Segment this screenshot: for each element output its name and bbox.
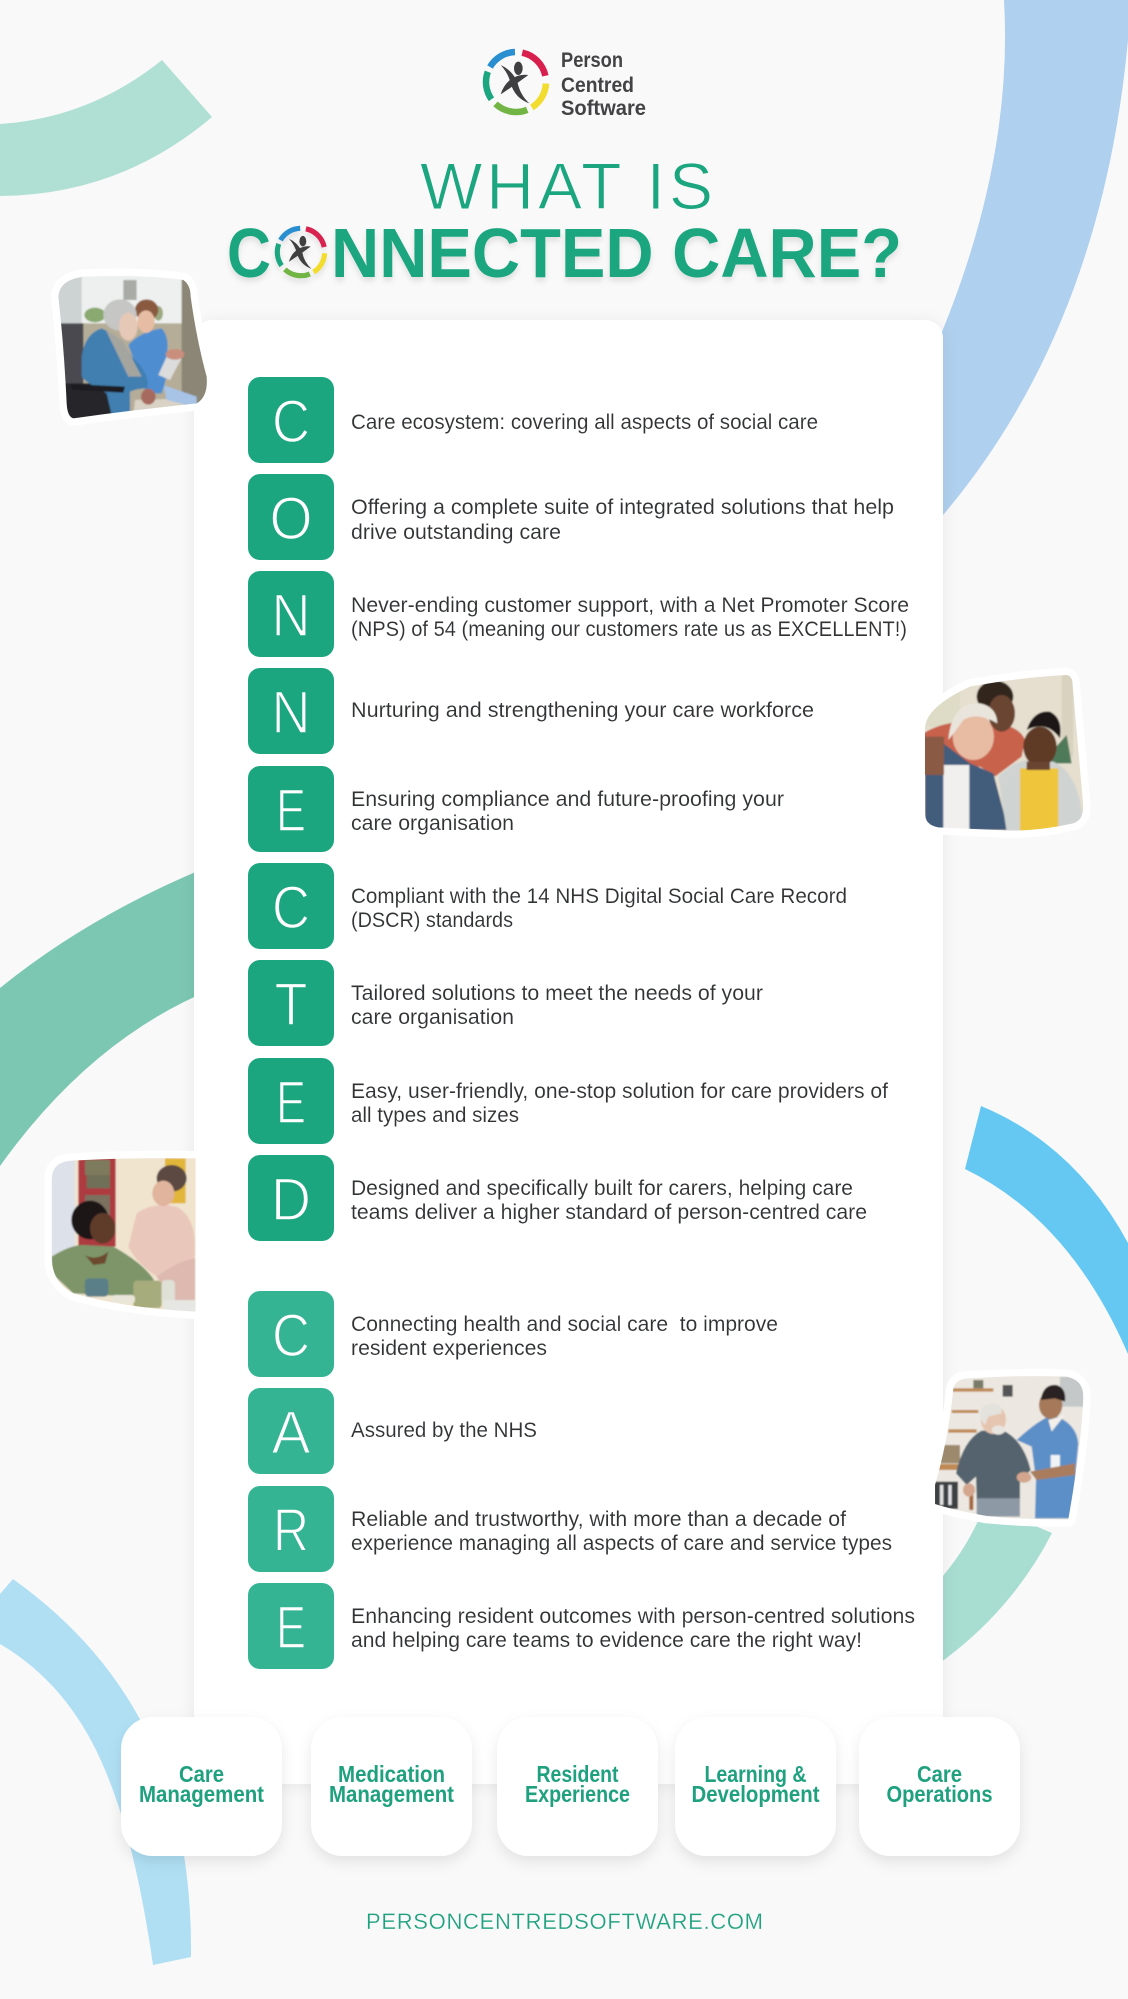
title line 2: C <box>227 214 271 292</box>
title ring icon <box>268 219 334 285</box>
title line 2: NNECTED CARE? <box>331 214 902 292</box>
row N <box>248 571 909 657</box>
row E <box>248 1058 888 1144</box>
tile: Care Operations: Care <box>917 1761 962 1787</box>
tile: Care Management <box>121 1717 282 1856</box>
photo: three friends laughing <box>920 670 1087 837</box>
logo figure <box>501 62 529 103</box>
tile: Resident Experience: Experience <box>525 1781 630 1807</box>
row O: drive outstanding care <box>351 521 561 544</box>
row O <box>248 474 894 560</box>
row A: A <box>272 1399 310 1466</box>
row C: C <box>272 1302 310 1369</box>
row C: C <box>272 388 310 455</box>
tile: Learning & Development: Learning & <box>704 1761 806 1787</box>
row A <box>248 1388 537 1474</box>
title <box>227 149 902 292</box>
tile: Resident Experience: Resident <box>536 1761 619 1787</box>
logo ring <box>474 40 558 124</box>
row C: Connecting health and social care to improve <box>351 1313 778 1336</box>
row A: Assured by the NHS <box>351 1419 537 1442</box>
tile: Resident Experience <box>497 1717 658 1856</box>
footer url: PERSONCENTREDSOFTWARE.COM <box>366 1909 763 1934</box>
logo wordmark: Centred <box>561 74 634 97</box>
logo <box>474 40 646 124</box>
photo: carer with woman in wheelchair <box>58 276 207 418</box>
panel: main white card <box>194 320 943 1784</box>
tile: Care Operations: Operations <box>886 1781 992 1807</box>
category tiles <box>121 1717 1020 1856</box>
tile: Learning & Development: Development <box>692 1781 820 1807</box>
acrostic list: CARE <box>248 1291 915 1669</box>
row E: Ensuring compliance and future-proofing your <box>351 788 784 811</box>
tile: Medication Management: Medication <box>338 1761 445 1787</box>
row R: R <box>273 1497 309 1564</box>
row E: and helping care teams to evidence care the right way! <box>351 1629 862 1652</box>
arc: right sky blue <box>965 1106 1128 1354</box>
row O: Offering a complete suite of integrated solutions that help <box>351 496 894 519</box>
row C: resident experiences <box>351 1337 547 1360</box>
row E: E <box>276 1069 306 1136</box>
row E: all types and sizes <box>351 1104 519 1127</box>
tile: Care Management: Care <box>179 1761 224 1787</box>
row E: care organisation <box>351 812 514 835</box>
row C <box>248 863 847 949</box>
row E: Easy, user-friendly, one-stop solution for care providers of <box>351 1080 888 1103</box>
row T: T <box>274 971 308 1038</box>
acrostic list: CONNECTED <box>248 377 909 1241</box>
logo wordmark <box>561 49 646 120</box>
tile: Learning & Development <box>675 1717 836 1856</box>
tile: Care Operations <box>859 1717 1020 1856</box>
row R <box>248 1486 892 1572</box>
tile: Medication Management <box>311 1717 472 1856</box>
photo: carer walking with elderly man <box>930 1373 1087 1523</box>
row N: (NPS) of 54 (meaning our customers rate us as EXCELLENT!) <box>351 618 907 641</box>
row D <box>248 1155 867 1241</box>
row D: teams deliver a higher standard of person-centred care <box>351 1201 867 1224</box>
row N: Never-ending customer support, with a Net Promoter Score <box>351 594 909 617</box>
row E <box>248 766 784 852</box>
arc: top-left mint <box>0 60 212 196</box>
row T: Tailored solutions to meet the needs of your <box>351 982 763 1005</box>
arc: left teal <box>0 866 210 1166</box>
arc: bottom-right mint <box>930 1505 1052 1670</box>
photo: carer with seated woman <box>47 1153 200 1317</box>
row N: N <box>272 582 310 649</box>
row E: E <box>276 1594 306 1661</box>
row C <box>248 1291 778 1377</box>
row R: experience managing all aspects of care and service types <box>351 1532 892 1555</box>
logo wordmark: Person <box>561 49 623 72</box>
row T <box>248 960 763 1046</box>
row C: Care ecosystem: covering all aspects of social care <box>351 411 818 434</box>
tile: Care Management: Management <box>139 1781 264 1807</box>
row E: E <box>276 777 306 844</box>
row C: Compliant with the 14 NHS Digital Social Care Record <box>351 885 847 908</box>
title line 1: WHAT IS <box>420 149 713 223</box>
row E <box>248 1583 915 1669</box>
row C <box>248 377 818 463</box>
row R: Reliable and trustworthy, with more than a decade of <box>351 1508 846 1531</box>
tile: Medication Management: Management <box>329 1781 454 1807</box>
logo wordmark: Software <box>561 97 646 120</box>
row C: C <box>272 874 310 941</box>
row N: Nurturing and strengthening your care workforce <box>351 699 814 722</box>
row D: Designed and specifically built for carers, helping care <box>351 1177 853 1200</box>
row O: O <box>270 485 312 552</box>
row N: N <box>272 679 310 746</box>
row C: (DSCR) standards <box>351 909 513 932</box>
row E: Enhancing resident outcomes with person-centred solutions <box>351 1605 915 1628</box>
row T: care organisation <box>351 1006 514 1029</box>
arc: bottom-left light blue <box>0 1579 191 1965</box>
row N <box>248 668 814 754</box>
row D: D <box>271 1166 311 1233</box>
arc: top-right blue <box>930 0 1128 530</box>
